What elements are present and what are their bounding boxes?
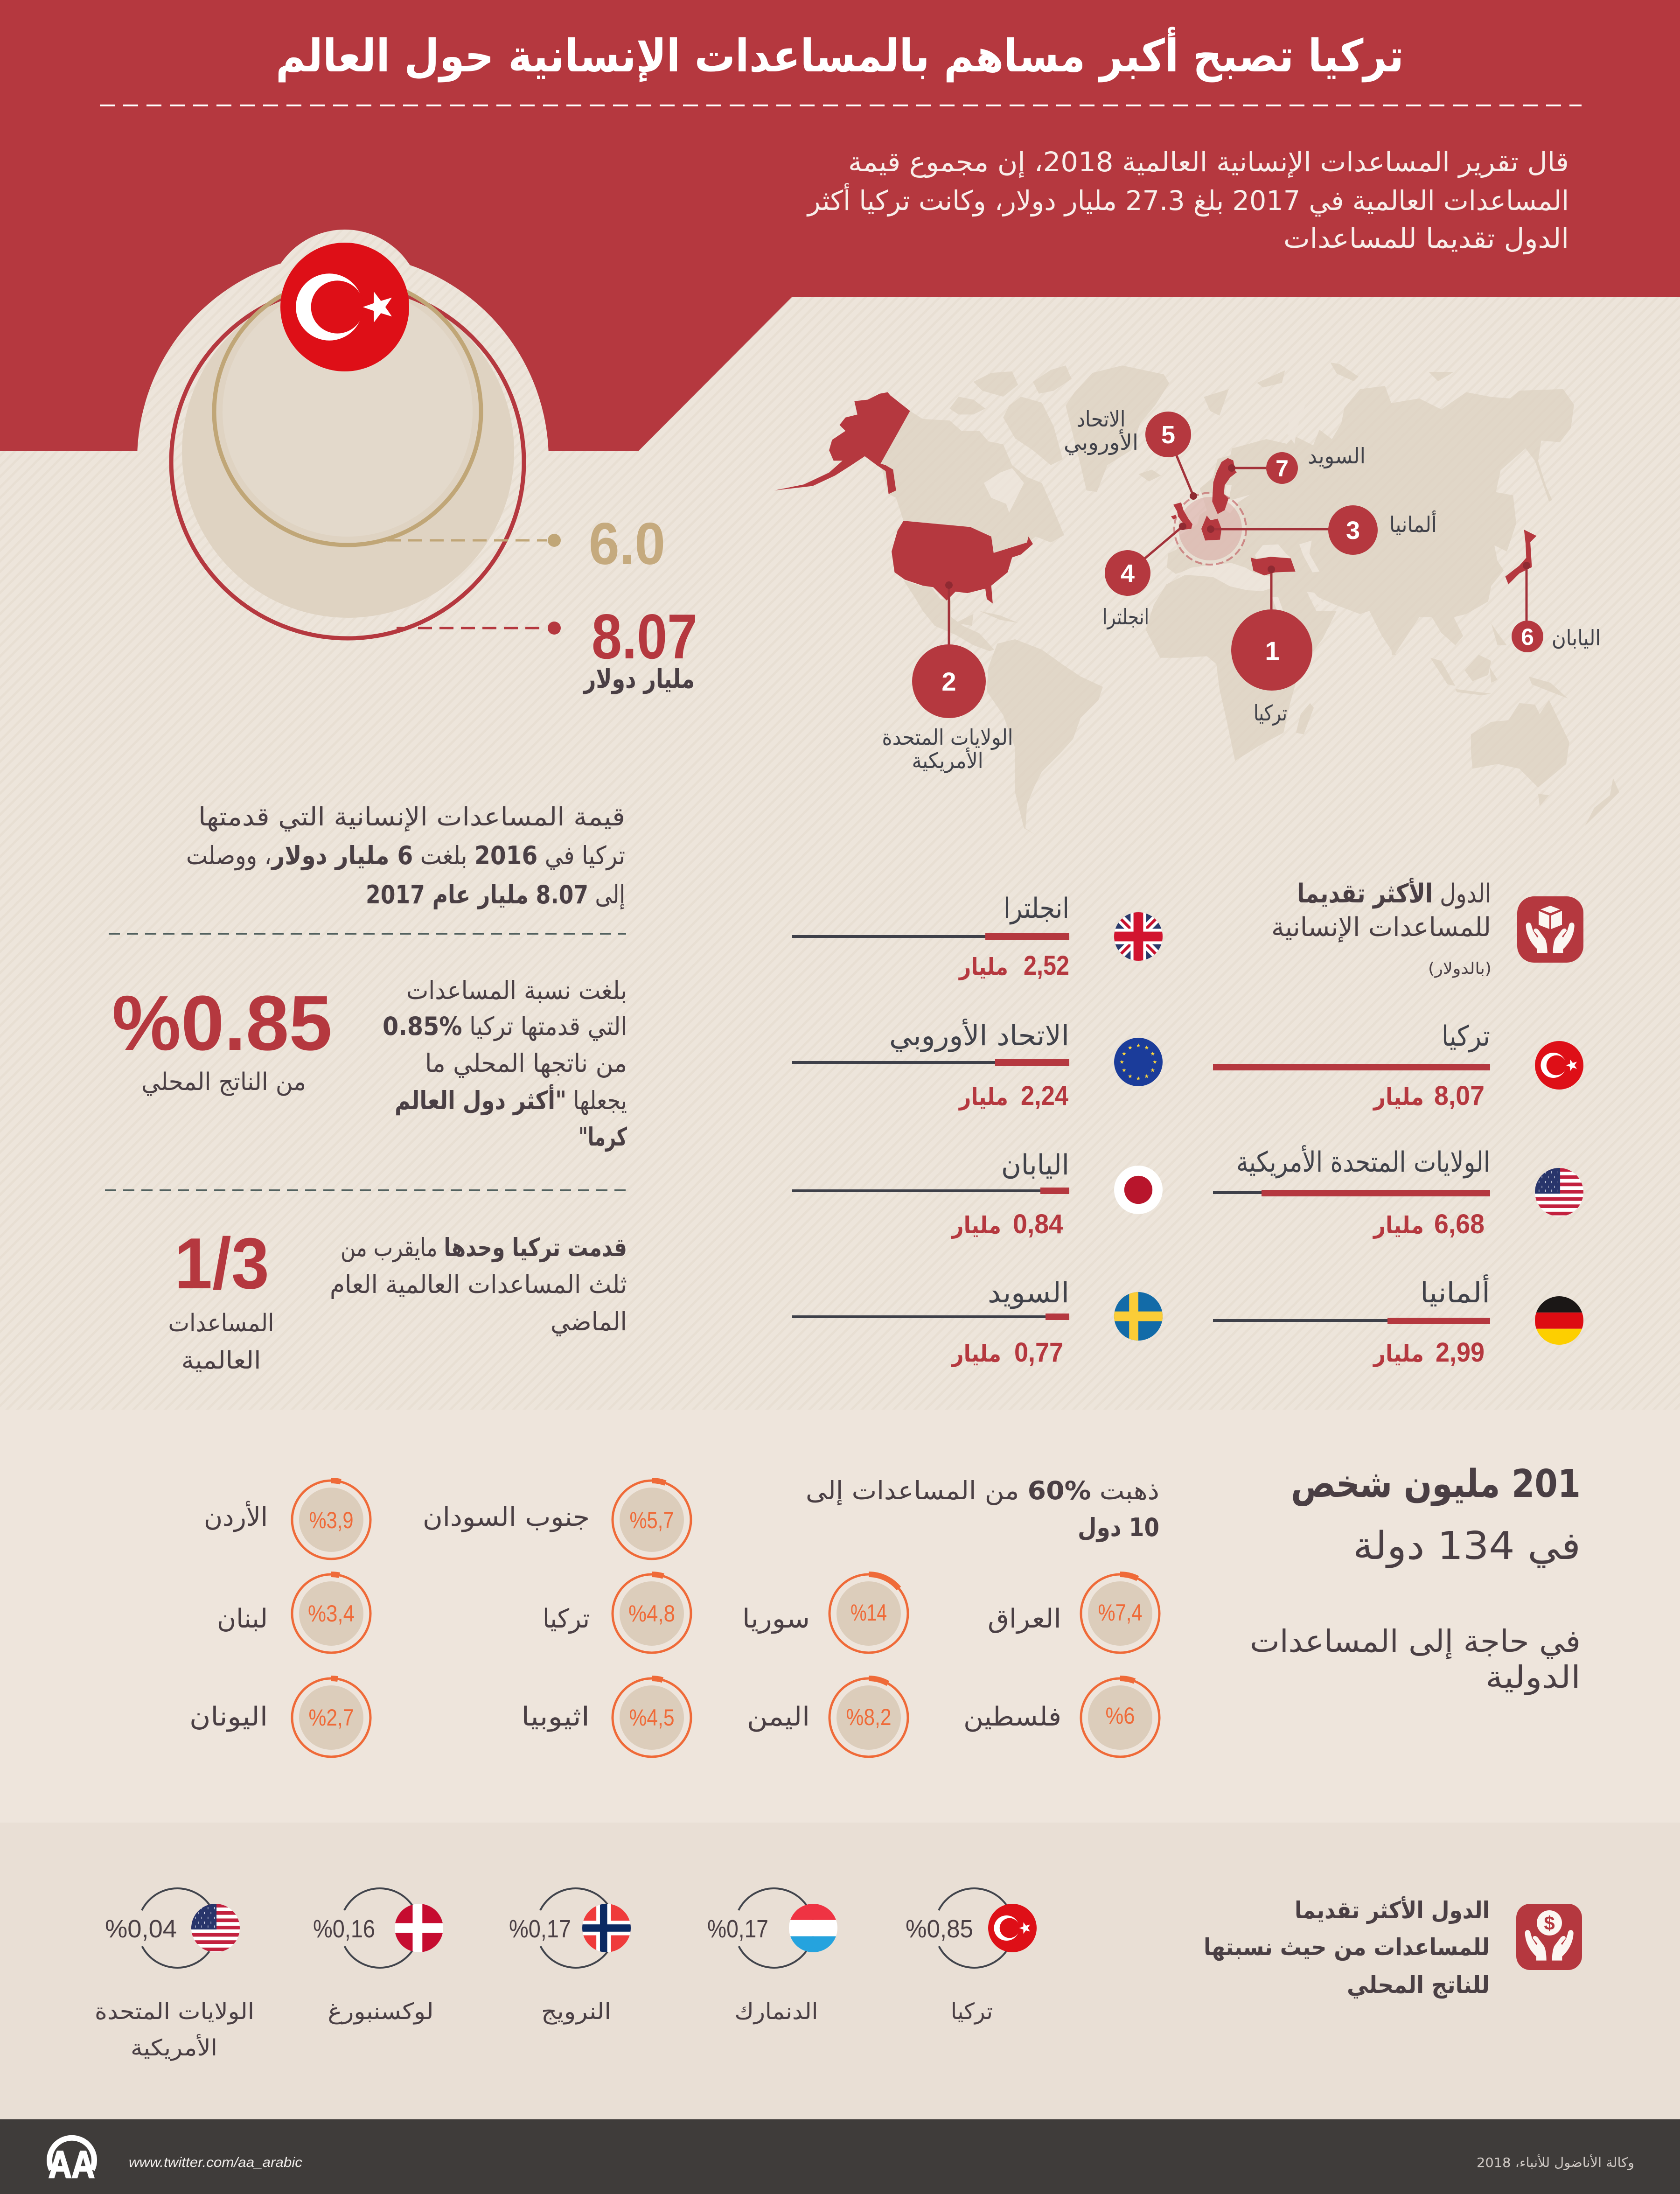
GDP ranking heading with icon: [1204, 1896, 1582, 1999]
intro text: المساعدات العالمية في 2017 بلغ 27.3 مليار دولار، وكانت تركيا أكثر: [806, 183, 1569, 217]
value 8.07 billion dollars: مليار دولار: [583, 664, 695, 694]
donut: Turkey: [543, 1574, 691, 1653]
statistic: 0.85 percent of GDP: %0.85: [112, 980, 332, 1067]
text: one third of world aid: [330, 1233, 627, 1336]
donut: South Sudan: %5,7: [630, 1507, 674, 1533]
GDP item: Turkey: [906, 1875, 1037, 2025]
statistic: one third: [168, 1223, 274, 1375]
text: share of GDP: بلغت نسبة المساعدات: [406, 976, 627, 1005]
text: people in need: في حاجة إلى المساعدات: [1250, 1623, 1581, 1660]
GDP ranking heading with icon: للناتج المحلي: [1347, 1971, 1490, 1999]
map marker 1: Turkey: 1: [1265, 636, 1280, 665]
row: United States: مليار: [1372, 1212, 1424, 1239]
map marker 7: Sweden: السويد: [1308, 443, 1366, 469]
donut: Syria: سوريا: [742, 1604, 810, 1634]
icon: hands holding coin: [1516, 1904, 1582, 1970]
donut: Ethiopia: [521, 1678, 691, 1757]
GDP item: United States: %0,04: [105, 1915, 177, 1943]
donut: Turkey: %4,8: [628, 1600, 675, 1627]
map marker 6: Japan: [1512, 562, 1601, 652]
donut: Ethiopia: %4,5: [629, 1705, 675, 1731]
GDP item: Luxembourg label, Denmark flag: [313, 1875, 443, 2025]
row: Japan: مليار: [950, 1212, 1001, 1239]
red header panel: [0, 0, 1680, 451]
donut: Palestine: فلسطين: [963, 1702, 1061, 1732]
text: aid value 2016-2017: [186, 802, 625, 909]
donut: Jordan: %3,9: [309, 1507, 354, 1533]
icon: Turkey flag: [280, 243, 409, 371]
map: Europe highlight: [1174, 493, 1246, 565]
text: people in need: في 134 دولة: [1353, 1524, 1581, 1568]
map: United Kingdom: [1171, 503, 1192, 531]
map marker 3: Germany: ألمانيا: [1389, 510, 1437, 537]
GDP item: United States: الولايات المتحدة: [95, 1998, 254, 2025]
text: people in need: الدولية: [1485, 1659, 1581, 1695]
text: share of GDP: كرما": [579, 1122, 627, 1152]
donut: Palestine: %6: [1106, 1703, 1135, 1729]
text: people in need: 201 مليون شخص: [1291, 1462, 1581, 1506]
GDP item: Denmark label, Luxembourg flag: %0,17: [707, 1915, 768, 1943]
donut: Jordan: الأردن: [204, 1501, 268, 1532]
donut: Iraq: [988, 1574, 1159, 1653]
row: Germany: ألمانيا: [1420, 1274, 1490, 1309]
text: one third of world aid: قدمت تركيا وحدها مايقرب من: [341, 1233, 627, 1262]
map marker 5: EU: [1064, 406, 1197, 500]
GDP item: United States: [95, 1875, 254, 2061]
map marker 2: USA: [882, 581, 1013, 774]
text: 60 percent to 10 countries: ذهبت %60 من المساعدات إلى: [806, 1476, 1159, 1505]
row: United Kingdom: 2,52: [1024, 950, 1069, 981]
value 6.0: [387, 510, 665, 577]
donut: Syria: %14: [850, 1600, 887, 1626]
footer credit: وكالة الأناضول للأنباء، 2018: [1477, 2154, 1634, 2170]
GDP item: United States: الأمريكية: [131, 2033, 217, 2061]
row: European Union: [792, 1019, 1163, 1111]
donut: Greece: %2,7: [309, 1705, 354, 1731]
row: Sweden: السويد: [988, 1277, 1069, 1309]
row: Germany: 2,99: [1436, 1337, 1485, 1368]
map marker 3: Germany: [1207, 505, 1437, 555]
map: Japan: [1506, 530, 1536, 584]
value 6.0: 6.0: [589, 510, 665, 577]
GDP item: Norway: [509, 1875, 631, 2025]
GDP ranking heading with icon: الدول الأكثر تقديما: [1295, 1896, 1490, 1924]
comparison circles 2016 vs 2017: [137, 230, 549, 665]
donut: Iraq: العراق: [988, 1604, 1061, 1634]
map: Sweden: [1212, 458, 1237, 514]
GDP item: Turkey: %0,85: [906, 1915, 973, 1943]
row: Turkey: مليار: [1372, 1083, 1424, 1111]
map: Alaska: [774, 392, 910, 494]
map: United States: [892, 521, 1033, 603]
row: European Union: الاتحاد الأوروبي: [889, 1019, 1069, 1052]
donut: Jordan: [204, 1481, 370, 1559]
text: aid value 2016-2017: إلى 8.07 مليار عام 2017: [366, 880, 625, 909]
statistic: one third: 1/3: [174, 1223, 269, 1304]
text: share of GDP: [383, 976, 627, 1152]
map marker 1: Turkey: تركيا: [1254, 700, 1287, 726]
GDP item: Luxembourg label, Denmark flag: %0,16: [313, 1915, 375, 1943]
icon: hands holding box: [1517, 896, 1583, 963]
ranking heading with icon: [1271, 877, 1583, 978]
text: share of GDP: التي قدمتها تركيا %0.85: [383, 1012, 627, 1041]
statistic: 0.85 percent of GDP: من الناتج المحلي: [141, 1068, 306, 1096]
row: Japan: اليابان: [1001, 1149, 1069, 1181]
donut: Greece: [189, 1678, 370, 1757]
map marker 5: EU: الاتحاد: [1077, 406, 1125, 432]
map marker 6: Japan: 6: [1521, 624, 1534, 650]
row: United Kingdom: انجلترا: [1004, 892, 1069, 925]
GDP item: Turkey: تركيا: [951, 1998, 993, 2025]
row: United Kingdom: مليار: [958, 953, 1008, 980]
map marker 7: Sweden: [1228, 443, 1366, 484]
ranking heading with icon: الدول الأكثر تقديما: [1297, 877, 1491, 909]
map marker 2: USA: الولايات المتحدة: [882, 725, 1013, 750]
row: European Union: 2,24: [1021, 1081, 1068, 1111]
intro text: الدول تقديما للمساعدات: [1283, 223, 1569, 255]
text: share of GDP: من ناتجها المحلي ما: [425, 1048, 627, 1078]
text: aid value 2016-2017: تركيا في 2016 بلغت 6 مليار دولار، ووصلت: [186, 841, 625, 870]
row: European Union: مليار: [958, 1083, 1008, 1111]
map marker 3: Germany: 3: [1346, 517, 1360, 545]
donut: South Sudan: [423, 1481, 691, 1559]
row: United States: 6,68: [1434, 1209, 1485, 1239]
donut: Iraq: %7,4: [1098, 1600, 1142, 1626]
donut: Lebanon: لبنان: [217, 1604, 268, 1634]
GDP item: Luxembourg label, Denmark flag: لوكسنبورغ: [328, 1998, 434, 2025]
row: Sweden: [792, 1277, 1163, 1368]
donut: Palestine: [963, 1678, 1159, 1757]
donut: South Sudan: جنوب السودان: [423, 1502, 590, 1532]
text: one third of world aid: الماضي: [551, 1307, 627, 1336]
map marker 2: USA: 2: [941, 667, 956, 696]
donut: Greece: اليونان: [189, 1702, 268, 1732]
row: Sweden: مليار: [950, 1340, 1001, 1367]
donut: Ethiopia: اثيوبيا: [521, 1702, 590, 1732]
map marker 5: EU: الأوروبي: [1064, 429, 1138, 455]
ranking heading with icon: للمساعدات الإنسانية: [1271, 912, 1491, 943]
row: Sweden: 0,77: [1014, 1337, 1063, 1368]
donut: Yemen: [747, 1678, 908, 1757]
statistic: one third: المساعدات: [168, 1309, 274, 1337]
value 8.07 billion dollars: 8.07: [592, 601, 697, 672]
world map: [880, 363, 1619, 834]
row: Turkey: 8,07: [1434, 1081, 1485, 1111]
map marker 5: EU: 5: [1161, 421, 1175, 449]
statistic: one third: العالمية: [181, 1347, 261, 1375]
footer twitter link: www.twitter.com/aa_arabic: [129, 2155, 302, 2170]
text: 60 percent to 10 countries: [806, 1476, 1159, 1542]
GDP item: Denmark label, Luxembourg flag: الدنمارك: [734, 1998, 818, 2025]
row: Turkey: تركيا: [1442, 1020, 1490, 1053]
map marker 6: Japan: اليابان: [1552, 625, 1601, 650]
intro text: قال تقرير المساعدات الإنسانية العالمية 2018، إن مجموع قيمة: [848, 146, 1569, 178]
donut: Lebanon: [217, 1574, 370, 1653]
row: Japan: [792, 1149, 1163, 1239]
donut: Yemen: %8,2: [846, 1704, 891, 1730]
text: aid value 2016-2017: قيمة المساعدات الإنسانية التي قدمتها: [198, 802, 625, 831]
title: تركيا تصبح أكبر مساهم بالمساعدات الإنسانية حول العالم: [276, 27, 1404, 83]
map marker 1: Turkey: [1231, 566, 1312, 726]
GDP ranking heading with icon: للمساعدات من حيث نسبتها: [1204, 1934, 1490, 1961]
ranking heading with icon: (بالدولار): [1428, 959, 1492, 978]
map marker 4: UK: [1102, 523, 1186, 630]
row: United Kingdom: [792, 892, 1163, 981]
map: Turkey: [1251, 557, 1296, 575]
text: 60 percent to 10 countries: 10 دول: [1078, 1513, 1159, 1542]
map: Germany: [1201, 516, 1221, 540]
map marker 2: USA: الأمريكية: [912, 747, 983, 774]
icon: hands holding coin: $: [1544, 1912, 1555, 1934]
donut: Syria: [742, 1574, 908, 1653]
GDP item: Norway: النرويج: [541, 1998, 611, 2025]
GDP item: Norway: %0,17: [509, 1915, 571, 1943]
footer bar: [0, 2119, 1680, 2194]
footer logo: AA: [49, 2144, 95, 2186]
map marker 4: UK: 4: [1121, 559, 1135, 587]
row: United States: [1213, 1145, 1583, 1239]
donut: Yemen: اليمن: [747, 1702, 810, 1732]
text: one third of world aid: ثلث المساعدات العالمية العام: [330, 1270, 627, 1299]
donut: Lebanon: %3,4: [308, 1600, 355, 1627]
GDP item: Denmark label, Luxembourg flag: [707, 1875, 837, 2025]
intro text: [806, 146, 1569, 255]
donut: Turkey: تركيا: [543, 1604, 590, 1634]
text: share of GDP: يجعلها "أكثر دول العالم: [395, 1084, 627, 1115]
row: Germany: مليار: [1372, 1340, 1424, 1367]
map marker 7: Sweden: 7: [1276, 455, 1289, 482]
row: Germany: [1213, 1274, 1583, 1368]
value 8.07 billion dollars: [397, 601, 697, 694]
text: people in need: [1250, 1462, 1581, 1695]
map marker 4: UK: انجلترا: [1102, 604, 1149, 630]
row: Japan: 0,84: [1013, 1209, 1063, 1239]
row: United States: الولايات المتحدة الأمريكية: [1236, 1145, 1490, 1179]
row: Turkey: [1213, 1020, 1583, 1111]
